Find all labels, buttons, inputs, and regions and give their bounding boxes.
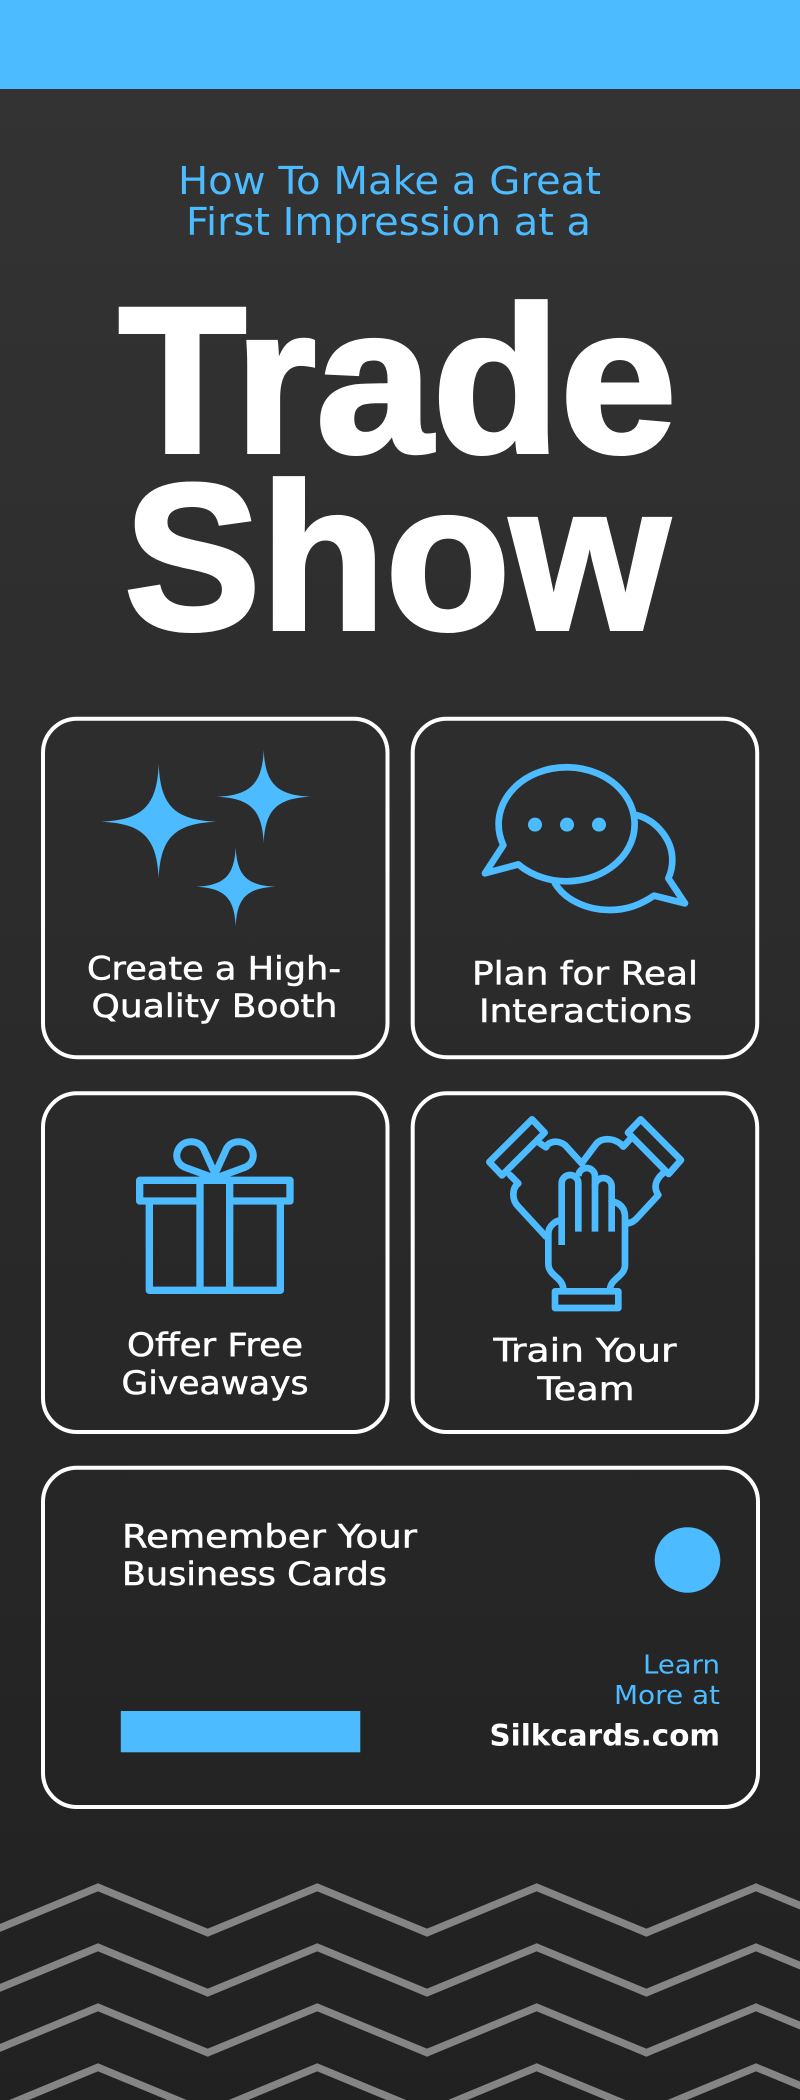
call to action text (490, 1650, 720, 1753)
label: remember your business cards (122, 1517, 418, 1593)
title (118, 265, 676, 674)
panel: remember your business cards (43, 1468, 758, 1807)
label: remember your business cards: Business Cards (122, 1555, 387, 1593)
label: train your team: Train Your (492, 1332, 677, 1370)
title: Show (124, 442, 670, 674)
label: plan for real interactions: Plan for Real (472, 954, 698, 992)
call to action text: Learn (643, 1650, 720, 1680)
label: create a high-quality booth (87, 949, 341, 1025)
blue rectangle (121, 1711, 360, 1752)
top accent bar (0, 0, 800, 89)
call to action text: More at (614, 1681, 720, 1711)
zigzag pattern (0, 1887, 800, 2100)
label: create a high-quality booth: Quality Booth (92, 987, 338, 1025)
panel: plan for real interactions (413, 719, 757, 1057)
icon: sparkle stars (101, 750, 311, 927)
subtitle (178, 159, 601, 245)
label: offer free giveaways: Offer Free (127, 1326, 303, 1364)
icon: speech bubbles (485, 767, 685, 910)
label: offer free giveaways (122, 1326, 308, 1402)
panel: train your team (413, 1093, 757, 1432)
icon: stacked hands (489, 1119, 681, 1308)
call to action text: Silkcards.com (490, 1719, 720, 1753)
label: train your team: Team (536, 1370, 634, 1408)
label: create a high-quality booth: Create a High- (87, 949, 341, 987)
panel: offer free giveaways (43, 1093, 388, 1432)
subtitle: How To Make a Great (178, 159, 601, 204)
label: plan for real interactions (472, 954, 698, 1030)
title: Trade (118, 265, 676, 497)
blue circle (655, 1527, 720, 1593)
label: train your team (492, 1332, 677, 1408)
icon: gift box (140, 1142, 290, 1290)
label: plan for real interactions: Interactions (479, 992, 692, 1030)
subtitle: First Impression at a (186, 200, 591, 245)
panel: create a high-quality booth (43, 719, 388, 1057)
label: offer free giveaways: Giveaways (122, 1364, 308, 1402)
label: remember your business cards: Remember Your (122, 1517, 418, 1555)
